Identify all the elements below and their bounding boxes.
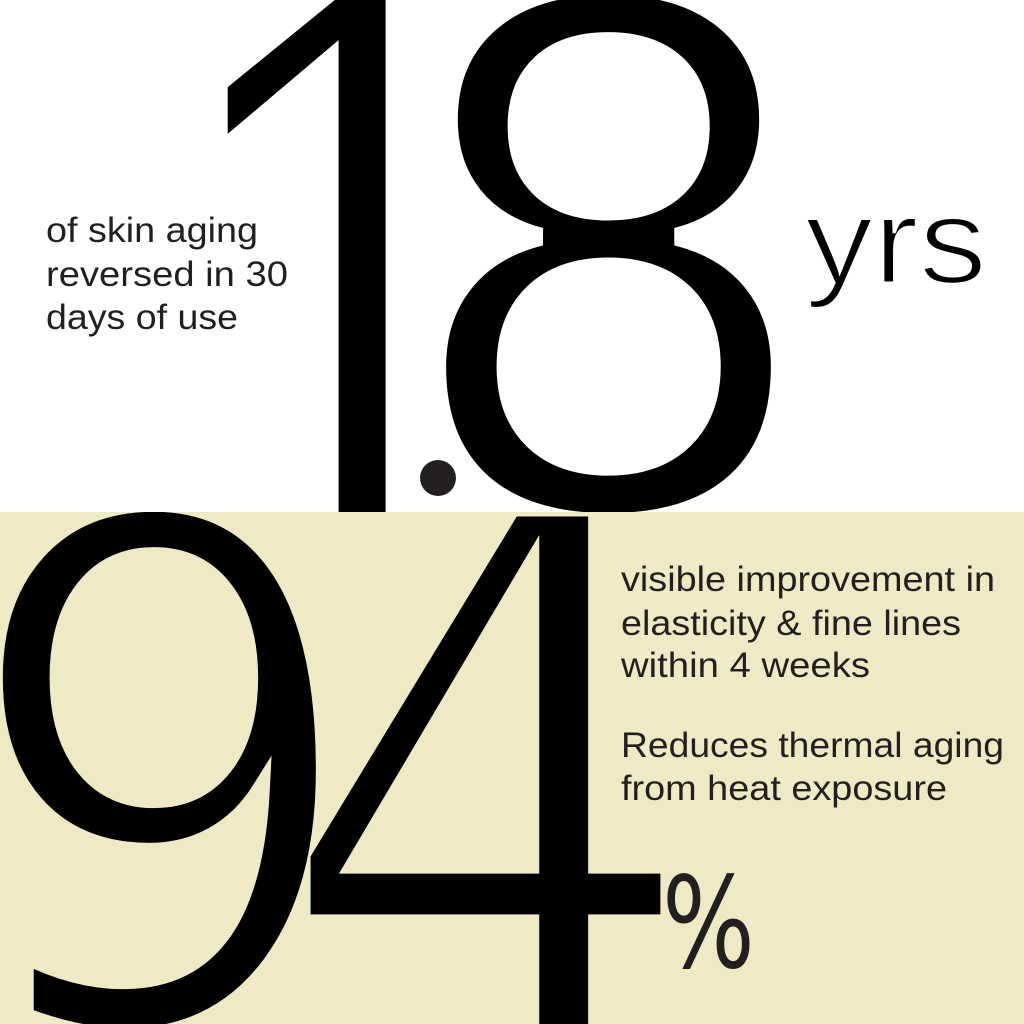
text block: thermal aging note — [621, 726, 1004, 808]
text block: elasticity description: visible improvement in — [621, 560, 995, 599]
text block: elasticity description: within 4 weeks — [620, 646, 870, 685]
unit: percent sign: % — [662, 849, 755, 997]
text block: thermal aging note: Reduces thermal aging — [621, 726, 1004, 765]
text block: thermal aging note: from heat exposure — [621, 769, 947, 808]
text block: skin aging description: reversed in 30 — [46, 255, 288, 294]
text block: elasticity description — [621, 566, 993, 678]
decimal point — [420, 460, 456, 496]
panel: skin aging reversed — [48, 0, 980, 512]
text block: elasticity description: elasticity & fine lines — [621, 604, 961, 643]
text block: skin aging description — [46, 211, 288, 337]
panel: elasticity improvement — [0, 512, 1024, 1024]
unit: yrs: yrs — [805, 173, 987, 309]
text block: skin aging description: days of use — [46, 298, 238, 337]
text block: skin aging description: of skin aging — [46, 211, 258, 250]
